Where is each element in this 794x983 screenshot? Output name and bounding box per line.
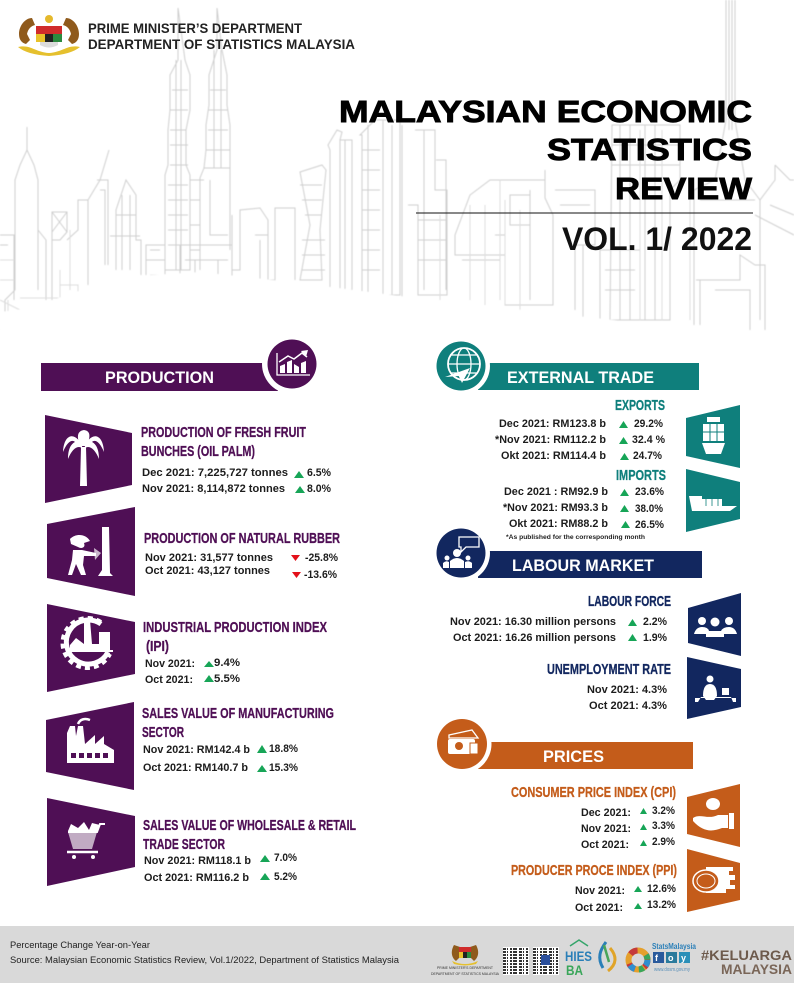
footer notes: Percentage Change Year-on-Year xyxy=(10,940,150,950)
panel: imports xyxy=(503,467,740,541)
icon: container ship front xyxy=(702,417,725,454)
icon: cargo ship side xyxy=(689,496,737,511)
panel: imports: 26.5% xyxy=(635,519,664,531)
panel: imports: IMPORTS xyxy=(616,467,666,484)
icon: shopping cart xyxy=(67,822,105,859)
logo: StatsMalaysia social: StatsMalaysia xyxy=(652,942,696,951)
panel: imports: Dec 2021 : RM92.9 b xyxy=(504,486,608,498)
panel: production header: PRODUCTION xyxy=(105,368,214,387)
logo: StatsMalaysia social xyxy=(652,942,696,973)
QR codes xyxy=(503,947,559,975)
icon: person at desk xyxy=(695,676,736,702)
footer crest and department name xyxy=(431,945,500,976)
panel: natural rubber: Nov 2021: 31,577 tonnes xyxy=(145,552,273,564)
panel: natural rubber: Oct 2021: 43,127 tonnes xyxy=(145,565,270,577)
panel: external trade header xyxy=(432,337,699,395)
panel: industrial production index xyxy=(47,604,327,692)
panel: consumer price index: CONSUMER PRICE INDEX (CPI) xyxy=(511,784,676,801)
panel: industrial production index: Oct 2021: xyxy=(145,674,193,686)
panel: consumer price index: 3.2% xyxy=(652,805,675,817)
panel: producer price index: PRODUCER PROCE INDEX (PPI) xyxy=(511,862,677,879)
logo: SDG wheel xyxy=(628,950,648,970)
icon: coin stack xyxy=(693,867,735,893)
panel: manufacturing sales: Nov 2021: RM142.4 b xyxy=(143,744,250,756)
panel: production header xyxy=(41,334,322,394)
icon: factory xyxy=(67,719,114,763)
panel: imports: 38.0% xyxy=(635,503,663,515)
heading: wholesale and retail: TRADE SECTOR xyxy=(143,836,225,853)
panel: consumer price index: 2.9% xyxy=(652,836,675,848)
panel: exports: 24.7% xyxy=(633,450,662,462)
header: department names: DEPARTMENT OF STATISTICS MALAYSIA xyxy=(88,36,355,52)
logo: StatsMalaysia social: o xyxy=(668,953,674,963)
logo: HIES BA: BA xyxy=(566,962,583,978)
panel: natural rubber: -25.8% xyxy=(305,552,338,564)
panel: producer price index: Nov 2021: xyxy=(575,885,625,897)
panel: industrial production index: 9.4% xyxy=(214,657,240,669)
panel: labour force: 1.9% xyxy=(643,632,667,644)
panel: producer price index: 12.6% xyxy=(647,883,676,895)
logo: StatsMalaysia social: www.dosm.gov.my xyxy=(654,967,690,973)
panel: labour market header: LABOUR MARKET xyxy=(512,556,655,575)
heading: manufacturing: SALES VALUE OF MANUFACTURING xyxy=(142,705,334,722)
icon: hand holding coin xyxy=(693,798,734,830)
panel: prices header xyxy=(432,714,693,774)
icon: people with speech bubble xyxy=(443,537,479,568)
icon: national crest xyxy=(18,15,80,56)
heading: manufacturing xyxy=(142,705,334,741)
panel: wholesale and retail: Oct 2021: RM116.2 b xyxy=(144,872,249,884)
panel: labour force: Oct 2021: 16.26 million persons xyxy=(453,632,616,644)
footer notes: Source: Malaysian Economic Statistics Review, Vol.1/2022, Department of Statistics Malaysia xyxy=(10,955,399,965)
title: STATISTICS xyxy=(547,132,752,167)
panel: imports: 23.6% xyxy=(635,486,664,498)
panel: labour force: Nov 2021: 16.30 million persons xyxy=(450,616,616,628)
panel: natural rubber: PRODUCTION OF NATURAL RUBBER xyxy=(144,530,340,547)
panel: manufacturing sales: Oct 2021: RM140.7 b xyxy=(143,762,248,774)
panel: fresh fruit bunches: 6.5% xyxy=(307,467,331,479)
panel: exports: 32.4 % xyxy=(632,434,665,446)
footnote: *As published for the corresponding month xyxy=(506,534,645,541)
panel: prices header: PRICES xyxy=(543,747,604,766)
logo: HIES BA: HIES xyxy=(565,948,592,964)
panel: consumer price index: Oct 2021: xyxy=(581,839,629,851)
heading: IPI: INDUSTRIAL PRODUCTION INDEX xyxy=(143,619,327,636)
footer notes xyxy=(10,940,399,965)
header: department names: PRIME MINISTER’S DEPARTMENT xyxy=(88,20,302,36)
panel: fresh fruit bunches: 8.0% xyxy=(307,483,331,495)
title: REVIEW xyxy=(615,171,753,206)
heading: manufacturing: SECTOR xyxy=(142,724,184,741)
panel: exports: EXPORTS xyxy=(615,397,665,414)
panel: exports xyxy=(495,397,740,468)
panel: wholesale and retail: Nov 2021: RM118.1 b xyxy=(144,855,251,867)
panel: manufacturing sales xyxy=(46,702,334,790)
panel: industrial production index: Nov 2021: xyxy=(145,658,195,670)
title: MALAYSIAN ECONOMIC xyxy=(339,94,752,129)
panel: labour force xyxy=(450,593,741,656)
heading: fresh fruit: PRODUCTION OF FRESH FRUIT xyxy=(141,424,306,441)
panel: fresh fruit bunches xyxy=(45,415,331,503)
white mask xyxy=(0,272,794,345)
panel: unemployment rate: Nov 2021: 4.3% xyxy=(587,684,667,696)
panel: labour force: LABOUR FORCE xyxy=(588,593,671,610)
panel: wholesale and retail: 7.0% xyxy=(274,852,297,864)
panel: unemployment rate: Oct 2021: 4.3% xyxy=(589,700,667,712)
heading: wholesale and retail: SALES VALUE OF WHOLESALE & RETAIL xyxy=(143,817,356,834)
logo: census hand xyxy=(600,942,615,971)
panel: unemployment rate xyxy=(547,657,741,719)
panel: producer price index xyxy=(511,849,740,914)
logo: keluarga malaysia: #KELUARGA xyxy=(701,947,792,963)
panel: manufacturing sales: 15.3% xyxy=(269,762,298,774)
panel: manufacturing sales: 18.8% xyxy=(269,743,298,755)
panel: fresh fruit bunches: Nov 2021: 8,114,872 tonnes xyxy=(142,483,285,495)
logo: keluarga malaysia xyxy=(701,947,792,977)
heading: fresh fruit xyxy=(141,424,306,460)
panel: producer price index: 13.2% xyxy=(647,899,676,911)
panel: imports: *Nov 2021: RM93.3 b xyxy=(503,502,608,514)
panel: exports: Dec 2021: RM123.8 b xyxy=(499,418,606,430)
panel: consumer price index xyxy=(511,784,740,851)
logo: HIES BA xyxy=(565,940,592,978)
panel: fresh fruit bunches: Dec 2021: 7,225,727 tonnes xyxy=(142,467,288,479)
panel: exports: *Nov 2021: RM112.2 b xyxy=(495,434,606,446)
title: VOL. 1/ 2022 xyxy=(562,221,752,257)
panel: unemployment rate: UNEMPLOYMENT RATE xyxy=(547,661,671,678)
panel: wholesale and retail: 5.2% xyxy=(274,871,297,883)
heading: wholesale and retail xyxy=(143,817,356,853)
logo: StatsMalaysia social: f xyxy=(655,953,659,963)
footer crest and department name: PRIME MINISTER'S DEPARTMENT xyxy=(437,966,494,970)
icon: workers xyxy=(694,617,737,637)
title xyxy=(339,94,753,257)
logo: StatsMalaysia social: y xyxy=(681,953,686,963)
heading: IPI: (IPI) xyxy=(146,638,169,655)
panel: external trade header: EXTERNAL TRADE xyxy=(507,368,654,387)
panel: consumer price index: Nov 2021: xyxy=(581,823,631,835)
panel: exports: 29.2% xyxy=(634,418,663,430)
logo: keluarga malaysia: MALAYSIA xyxy=(721,961,792,977)
heading: IPI xyxy=(143,619,327,655)
header: department names xyxy=(88,20,355,52)
skyline background illustration xyxy=(0,0,794,345)
icon: globe with plane xyxy=(445,348,480,383)
panel: labour market header xyxy=(432,524,702,582)
heading: fresh fruit: BUNCHES (OIL PALM) xyxy=(141,443,255,460)
icon: rubber tapper xyxy=(68,527,113,576)
panel: exports: Okt 2021: RM114.4 b xyxy=(501,450,606,462)
panel: wholesale and retail xyxy=(47,798,356,886)
panel: consumer price index: 3.3% xyxy=(652,820,675,832)
icon: rising chart xyxy=(277,350,310,375)
panel: natural rubber xyxy=(47,507,340,596)
icon: oil palm xyxy=(63,430,104,486)
icon: banknotes and coins xyxy=(448,730,478,754)
icon: gear and factory xyxy=(63,618,113,668)
panel: labour force: 2.2% xyxy=(643,616,667,628)
footer crest and department name: DEPARTMENT OF STATISTICS MALAYSIA xyxy=(431,972,500,976)
panel: natural rubber: -13.6% xyxy=(304,569,337,581)
panel: imports: Okt 2021: RM88.2 b xyxy=(509,518,608,530)
panel: producer price index: Oct 2021: xyxy=(575,902,623,914)
panel: consumer price index: Dec 2021: xyxy=(581,807,631,819)
footer bar xyxy=(0,926,794,983)
panel: industrial production index: 5.5% xyxy=(214,673,240,685)
